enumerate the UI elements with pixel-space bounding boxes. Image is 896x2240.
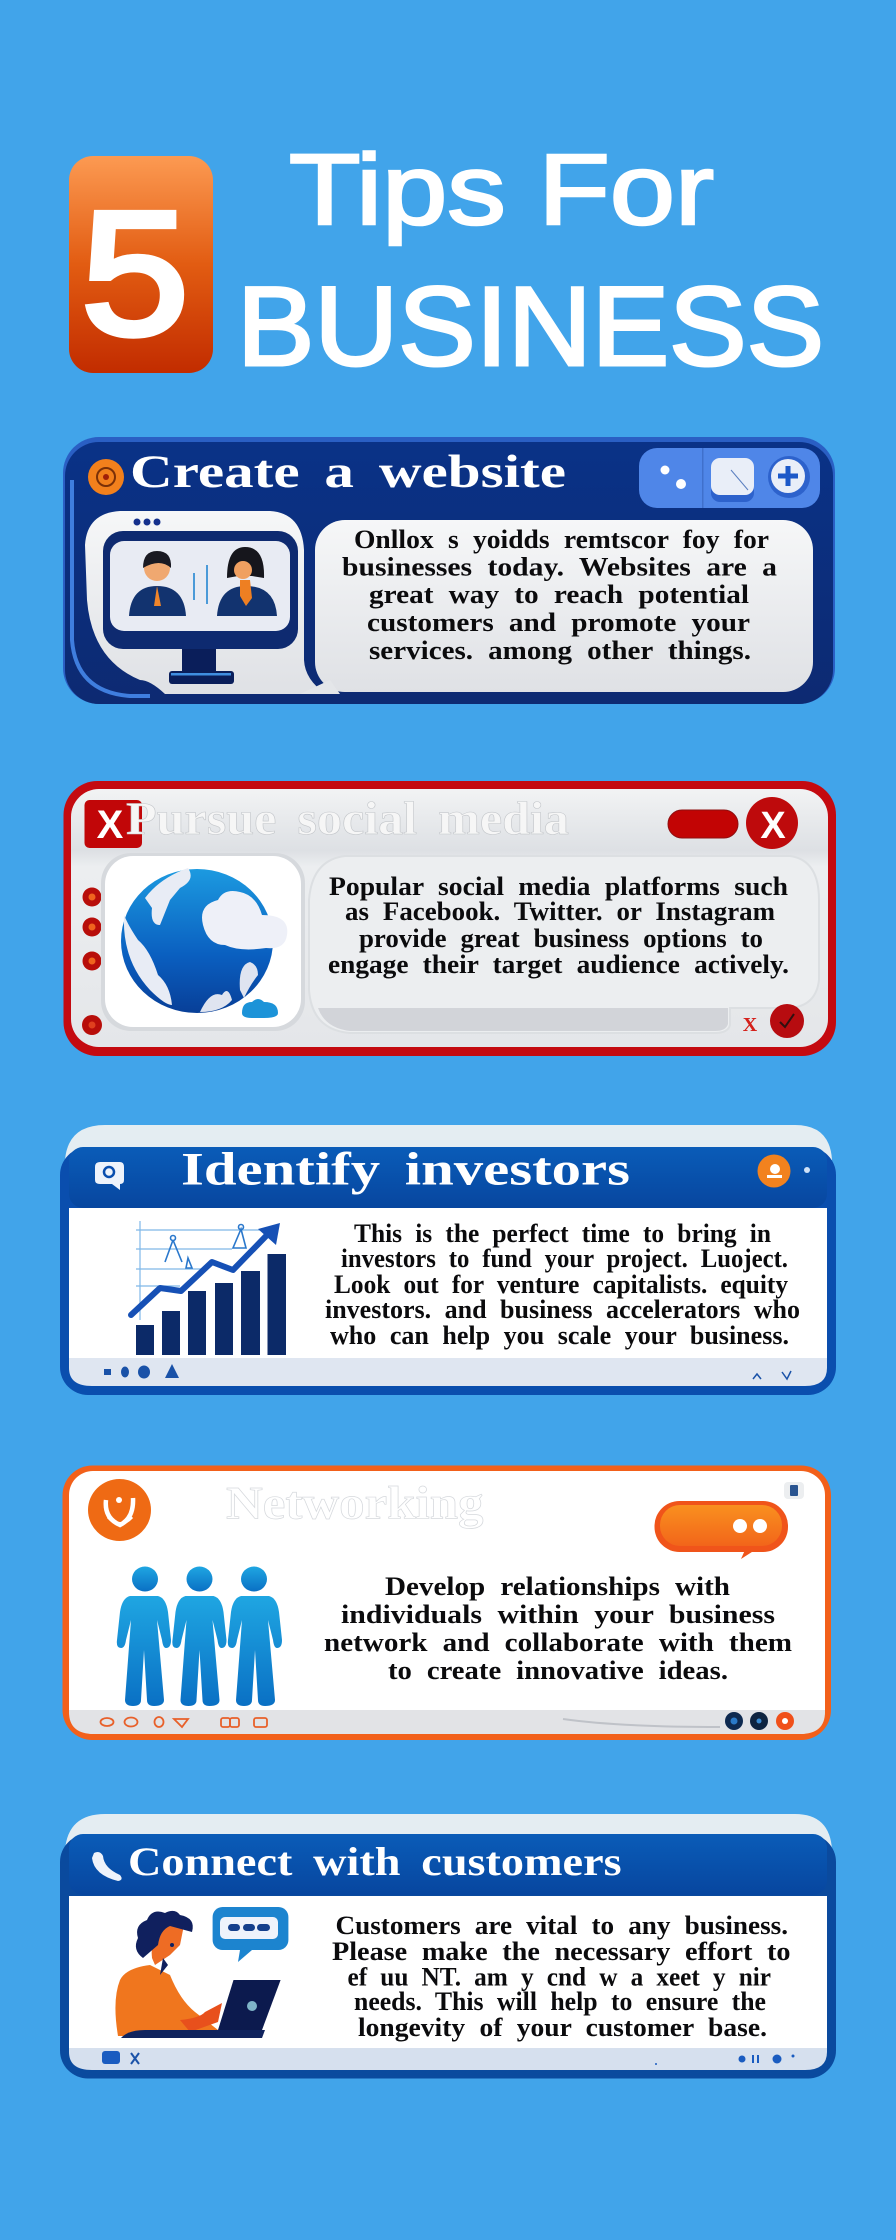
globe card: [101, 853, 305, 1031]
body text: who can help you scale your business.: [330, 1321, 789, 1350]
body text: investors to fund your project. Luoject.: [341, 1244, 788, 1273]
text box: Popular social media platforms such: [329, 872, 789, 901]
monitor illustration card: [85, 511, 326, 694]
panel heading: Create a website: [130, 446, 566, 498]
icon: woman on screen: [217, 547, 277, 616]
speech bubble with text: great way to reach potential: [369, 580, 749, 609]
icon: search bubble: [95, 1162, 124, 1190]
body text: longevity of your customer base.: [358, 2013, 767, 2042]
body text: network and collaborate with them: [324, 1628, 792, 1657]
number badge: 5: [81, 176, 189, 372]
icon: chat bubble: [213, 1907, 288, 1962]
icon: orange smiley: [88, 1479, 151, 1541]
body text: Look out for venture capitalists. equity: [334, 1270, 788, 1299]
speech bubble with text: [300, 520, 813, 694]
footer icons: [102, 2051, 794, 2065]
speech bubble with text: Onllox s yoidds remtscor foy for: [354, 525, 769, 554]
body text: Customers are vital to any business.: [336, 1911, 788, 1940]
window controls: X: [760, 805, 786, 847]
window controls: [668, 797, 798, 849]
icon: globe with cloud: [121, 868, 287, 1018]
text box: provide great business options to: [359, 924, 763, 953]
panel: create a website: [63, 437, 835, 704]
bottom right controls: [743, 1004, 804, 1038]
body text: needs. This will help to ensure the: [354, 1987, 766, 2016]
panel: identify investors: [60, 1125, 836, 1395]
text box: [309, 856, 819, 1033]
icon: red close square: [84, 800, 142, 848]
number badge: [69, 156, 213, 373]
icon: three people: [117, 1566, 282, 1706]
panel: connect with customers: [60, 1814, 836, 2078]
icon: speech pill: [654, 1501, 788, 1559]
body text: investors. and business accelerators who: [325, 1295, 800, 1324]
title line 2: BUSINESS: [237, 264, 824, 389]
body text: [324, 1572, 792, 1685]
status lights: [82, 888, 102, 1035]
speech bubble with text: services. among other things.: [369, 636, 751, 665]
text box: as Facebook. Twitter. or Instagram: [345, 897, 775, 926]
trend arrow: [131, 1223, 280, 1315]
title line 1: Tips For: [289, 134, 714, 246]
bar chart: [131, 1221, 286, 1355]
panel heading: Identify investors: [181, 1144, 630, 1196]
icon: orange target: [88, 459, 124, 495]
body text: [332, 1911, 790, 2042]
panel heading: Connect with customers: [128, 1839, 622, 1884]
icon: person at laptop: [115, 1911, 281, 2038]
header status icons: [758, 1154, 810, 1188]
body text: [325, 1219, 800, 1350]
bottom right controls: X: [743, 1014, 758, 1036]
panel heading: Pursue social media: [126, 793, 569, 845]
speech bubble with text: businesses today. Websites are a: [342, 552, 777, 582]
window buttons: [639, 448, 820, 508]
heading block: [69, 134, 824, 389]
small window icon: [784, 1482, 804, 1499]
body text: to create innovative ideas.: [388, 1656, 728, 1685]
footer icons: [100, 1712, 794, 1730]
icon: phone: [92, 1852, 122, 1881]
icon: man on screen: [129, 551, 186, 616]
body text: This is the perfect time to bring in: [354, 1219, 772, 1248]
speech bubble with text: customers and promote your: [367, 608, 750, 637]
icon: red close square: X: [97, 803, 124, 847]
stick figures: [165, 1224, 246, 1268]
body text: Develop relationships with: [385, 1572, 731, 1601]
panel: pursue social media: [64, 781, 836, 1056]
footer icons: [104, 1364, 791, 1379]
panel: networking: [62, 1466, 831, 1740]
panel heading: Networking: [226, 1478, 484, 1530]
text box: engage their target audience actively.: [328, 950, 789, 979]
body text: Please make the necessary effort to: [332, 1937, 790, 1966]
body text: individuals within your business: [341, 1600, 775, 1629]
body text: ef uu NT. am y cnd w a xeet y nir: [348, 1962, 771, 1992]
